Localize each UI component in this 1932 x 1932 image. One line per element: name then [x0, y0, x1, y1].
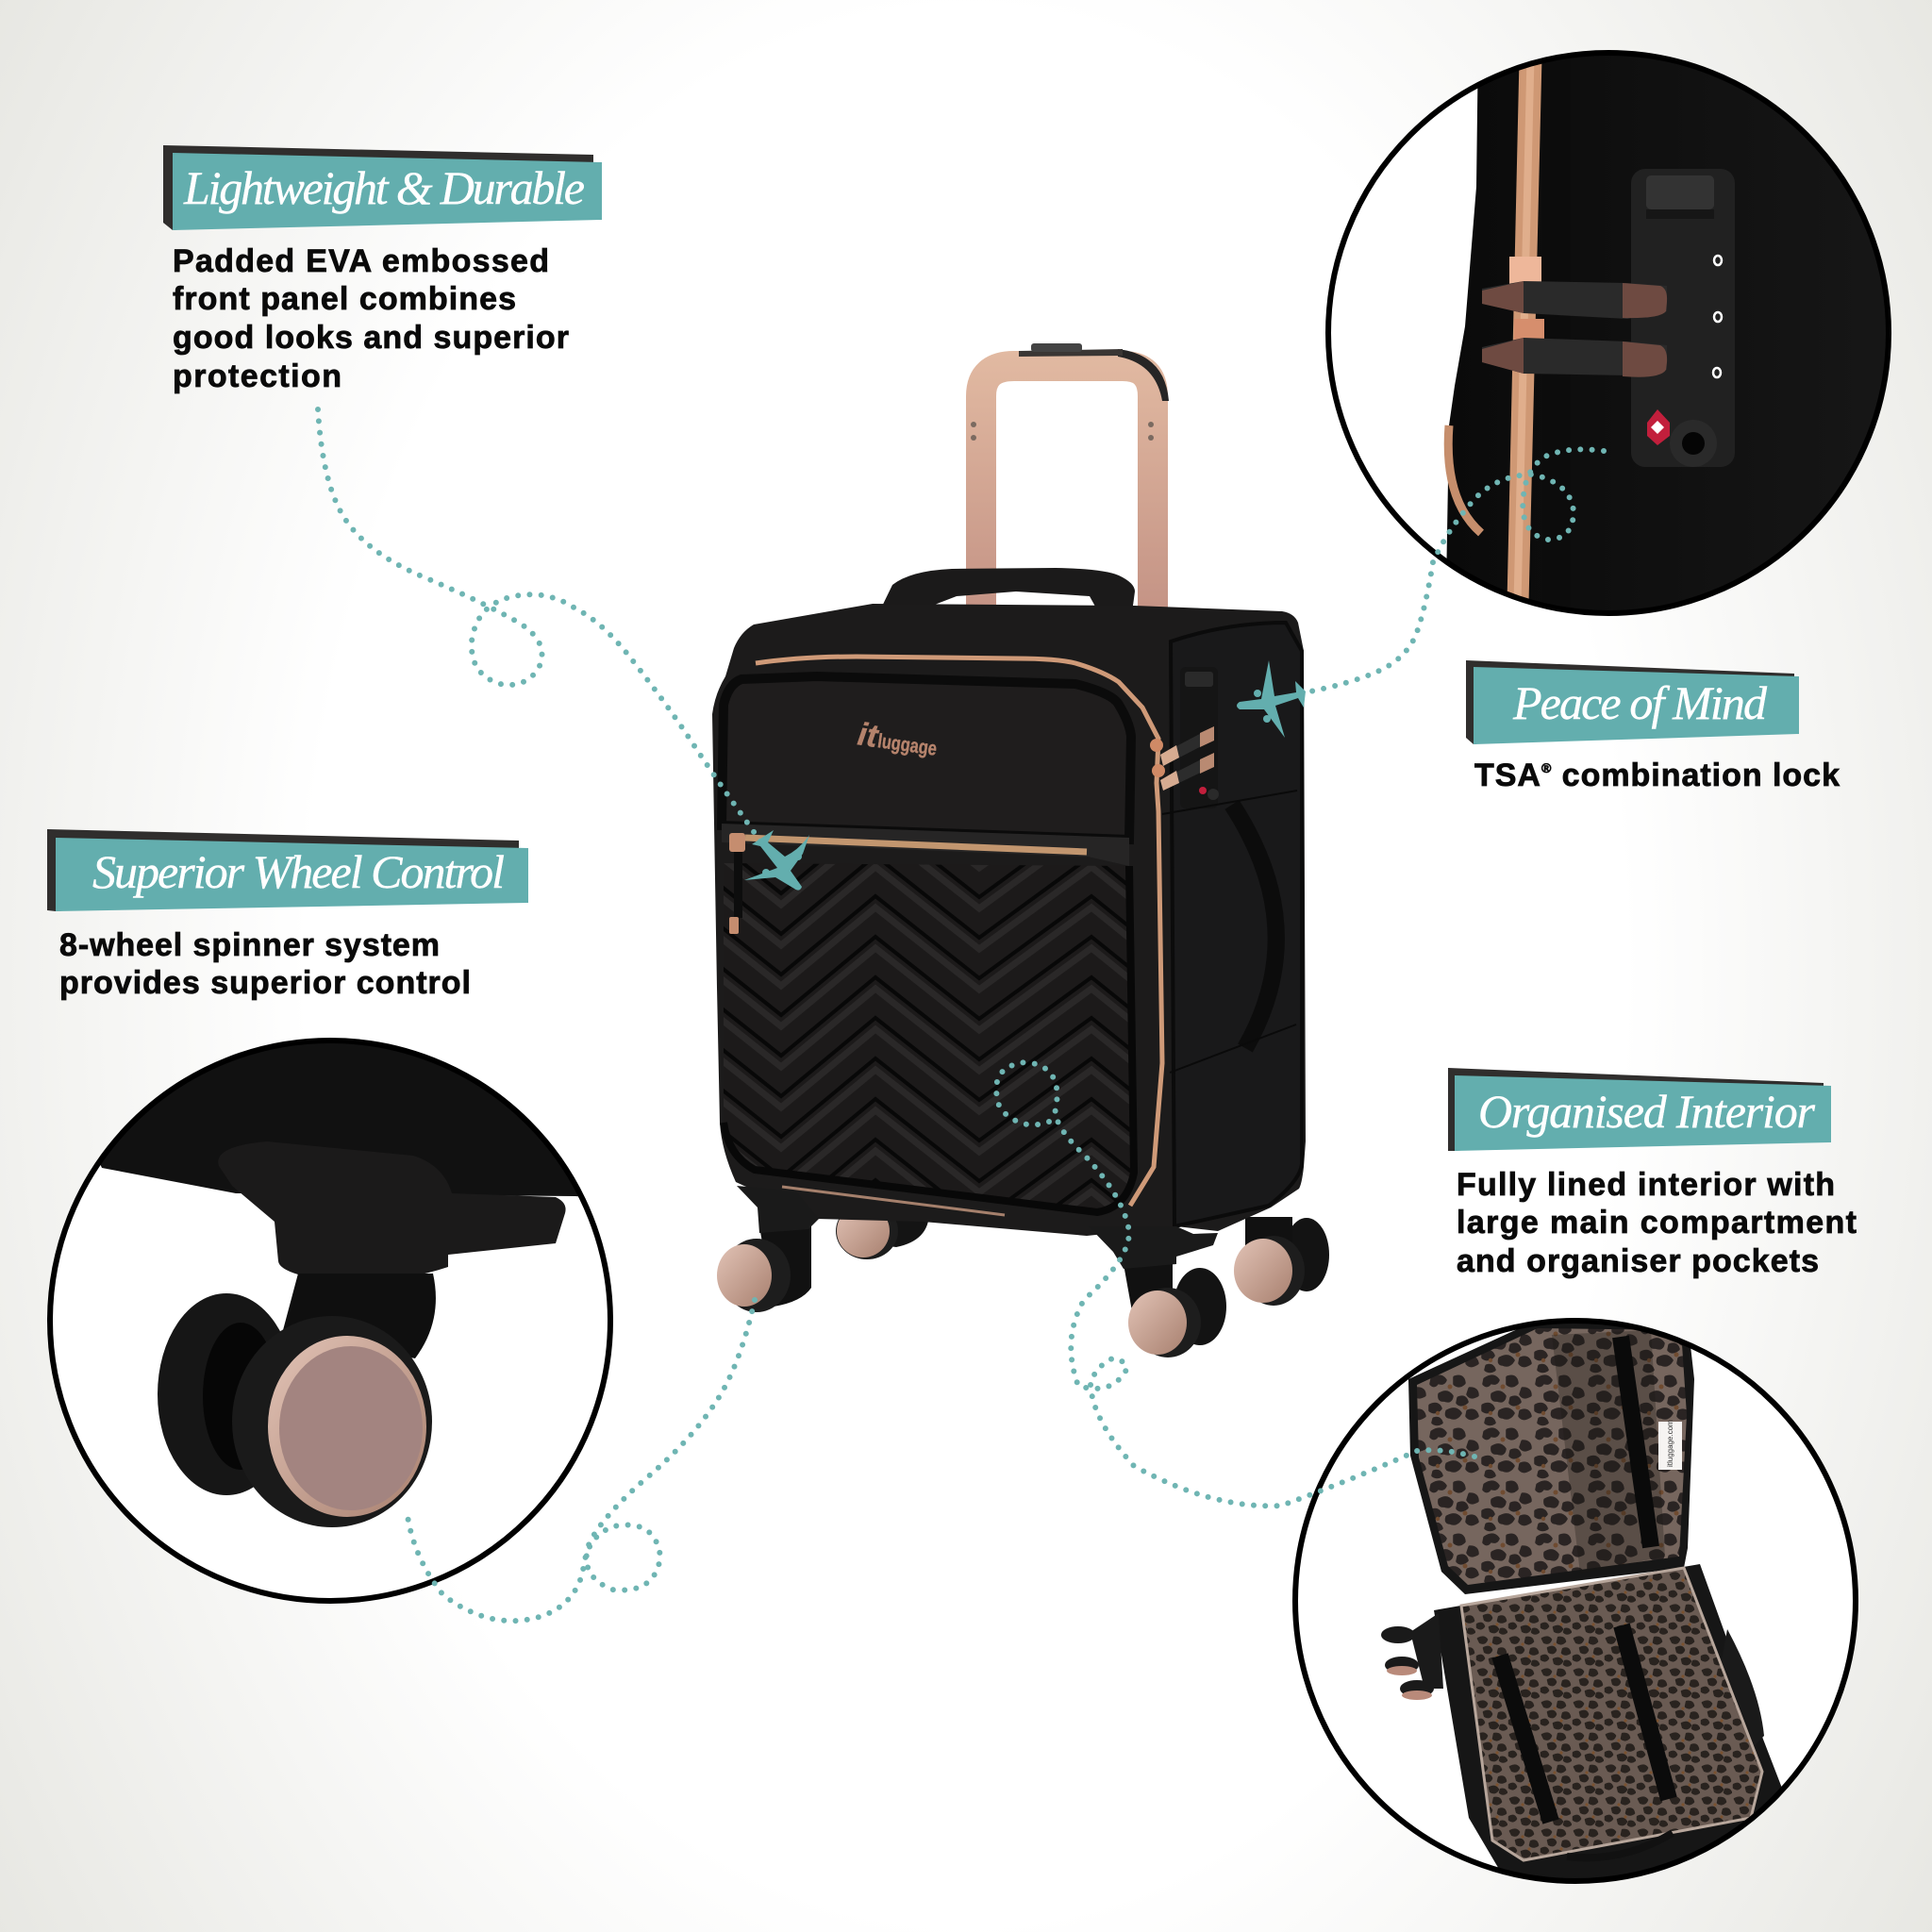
chevron quilted panel [724, 863, 1130, 1206]
text: lock description: ® [1541, 760, 1552, 775]
dotted route: lightweight to front panel [318, 409, 766, 849]
text: interior description: and organiser pockets [1457, 1243, 1819, 1279]
text: wheel description: provides superior control [59, 965, 471, 1001]
text: lightweight description [173, 243, 569, 394]
side seams [1162, 791, 1297, 1073]
logo: itluggage [856, 716, 940, 763]
photo circle: wheel close-up [38, 1028, 623, 1601]
side panel shading [1171, 623, 1302, 1226]
banner: Peace of Mind: Peace of Mind [1512, 676, 1768, 729]
text: lightweight description: Padded EVA embossed [173, 243, 549, 279]
zip pulls [729, 739, 1165, 934]
case body [712, 604, 1306, 1236]
text: lightweight description: protection [173, 358, 341, 394]
photo circle: leopard-print interior: itluggage.com [1666, 1420, 1674, 1467]
wheels [717, 1203, 1329, 1357]
text: interior description [1457, 1167, 1857, 1279]
side combination lock [1160, 667, 1219, 808]
suitcase product illustration [698, 343, 1329, 1357]
text: lock description: combination lock [1552, 758, 1840, 793]
panel piping [724, 866, 1134, 1212]
text: wheel description: 8-wheel spinner system [59, 927, 440, 963]
text: lock description: TSA [1474, 758, 1541, 793]
rose-gold zips [745, 657, 1162, 1215]
telescopic handle [971, 343, 1169, 613]
icon: plane on front pocket [744, 830, 809, 891]
text: interior description: Fully lined interior with [1457, 1167, 1835, 1203]
banner: Lightweight & Durable [163, 145, 602, 230]
icon: plane on side of case [1237, 660, 1306, 738]
side strap [1232, 805, 1276, 1048]
dotted route: lock to suitcase [1306, 449, 1604, 692]
banner: Organised Interior [1448, 1068, 1831, 1151]
photo circle: leopard-print interior [1295, 1321, 1856, 1887]
banner: Superior Wheel Control: Superior Wheel Control [92, 845, 505, 898]
banner: Organised Interior: Organised Interior [1478, 1085, 1816, 1138]
banner: Lightweight & Durable: Lightweight & Durable [183, 161, 585, 214]
dotted route: interior to suitcase [996, 1062, 1474, 1506]
dotted route: wheel to suitcase [407, 1300, 755, 1621]
banner: Peace of Mind [1466, 660, 1799, 744]
carry handle [876, 568, 1135, 618]
photo circle: TSA lock close-up [1328, 38, 1906, 641]
text: lightweight description: front panel combines [173, 281, 516, 317]
base corners [737, 1186, 1218, 1269]
text: interior description: large main compartment [1457, 1205, 1857, 1241]
text: wheel description [59, 927, 471, 1001]
pocket zip band [722, 824, 1129, 866]
banner: Superior Wheel Control [47, 829, 528, 911]
text: lightweight description: good looks and superior [173, 320, 569, 356]
upper front pocket [722, 676, 1131, 840]
